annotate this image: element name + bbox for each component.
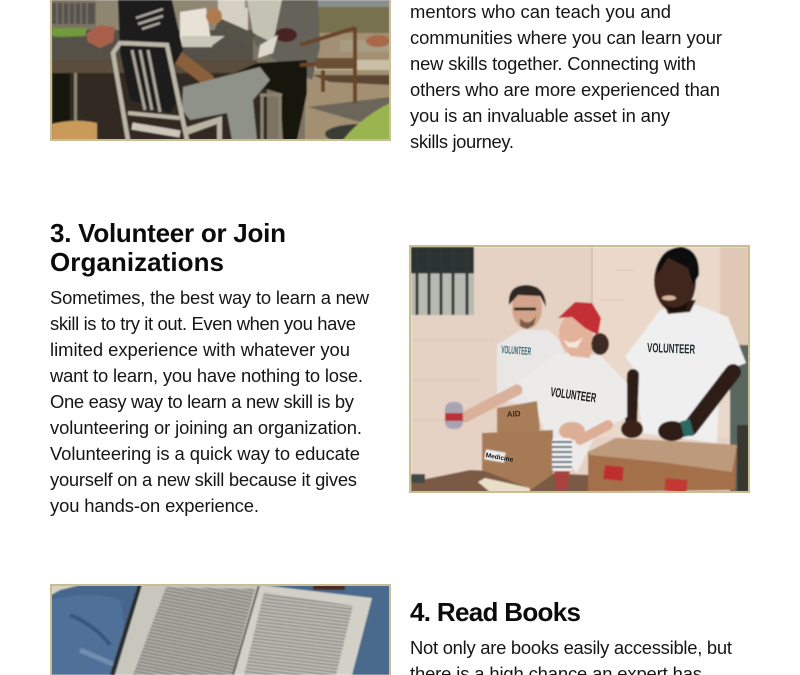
plant: [324, 123, 358, 139]
woman blazer: [247, 0, 320, 80]
text block: mentors paragraph: skills journey.: [410, 131, 514, 152]
text block: volunteering paragraph: limited experience with whatever you: [50, 339, 350, 360]
wood chair: [300, 27, 355, 103]
chair: [113, 43, 187, 140]
heading: 3. Volunteer or Join Organizations: 3. Volunteer or Join: [50, 218, 286, 248]
text block: mentors paragraph: [410, 1, 722, 152]
heading: 4. Read Books: 4. Read Books: [410, 597, 581, 627]
heading: 3. Volunteer or Join Organizations: Organizations: [50, 247, 224, 277]
arm: [175, 55, 208, 80]
left man: [497, 330, 565, 410]
woman: [537, 353, 628, 473]
text block: mentors paragraph: new skills together. Connecting with: [410, 53, 696, 74]
text block: books paragraph: Not only are books easily accessible, but: [410, 637, 732, 658]
text block: mentors paragraph: others who are more experienced than: [410, 79, 720, 100]
text block: volunteering paragraph: yourself on a new skill because it gives: [50, 469, 357, 490]
bottle: [445, 402, 463, 429]
text block: books paragraph: [410, 637, 732, 675]
text block: volunteering paragraph: Volunteering is a quick way to educate: [50, 443, 360, 464]
black shirt: [118, 0, 183, 113]
photo: mentor and mentee talking at a table: [51, 0, 395, 144]
photo: three volunteers packing boxes: VOLUNTEER: [550, 384, 598, 405]
window: [411, 272, 474, 316]
text block: volunteering paragraph: skill is to try it out. Even when you have: [50, 313, 356, 334]
cups: [552, 438, 572, 471]
grey jeans: [182, 67, 270, 140]
right man: [625, 305, 746, 443]
right background: [730, 345, 749, 492]
text block: mentors paragraph: mentors who can teach you and: [410, 1, 671, 22]
text block: volunteering paragraph: you hands-on experience.: [50, 495, 259, 516]
text block: mentors paragraph: you is an invaluable asset in any: [410, 105, 671, 126]
photo: three volunteers packing boxes: VOLUNTEER: [647, 340, 696, 357]
photo: three volunteers packing boxes: [410, 246, 749, 493]
AID box: [497, 401, 540, 437]
photo: three volunteers packing boxes: AID: [507, 409, 521, 419]
table: [411, 470, 590, 492]
photo: open book on denim: [51, 585, 390, 675]
text block: volunteering paragraph: Sometimes, the best way to learn a new: [50, 287, 370, 308]
black trousers: [234, 60, 308, 139]
stool: [260, 95, 282, 140]
basket: [52, 121, 97, 140]
photo: three volunteers packing boxes: Medicine: [485, 452, 514, 464]
big box: [588, 438, 737, 492]
medicine box: [482, 430, 553, 489]
photo: three volunteers packing boxes: VOLUNTEER: [501, 344, 532, 358]
text block: mentors paragraph: communities where you can learn your: [410, 27, 722, 48]
text block: volunteering paragraph: One easy way to learn a new skill is by: [50, 391, 355, 412]
heading: 3. Volunteer or Join Organizations: [50, 218, 286, 277]
text block: volunteering paragraph: volunteering or joining an organization.: [50, 417, 362, 438]
text block: volunteering paragraph: [49, 287, 370, 516]
text block: volunteering paragraph: want to learn, you have nothing to lose.: [49, 365, 363, 386]
